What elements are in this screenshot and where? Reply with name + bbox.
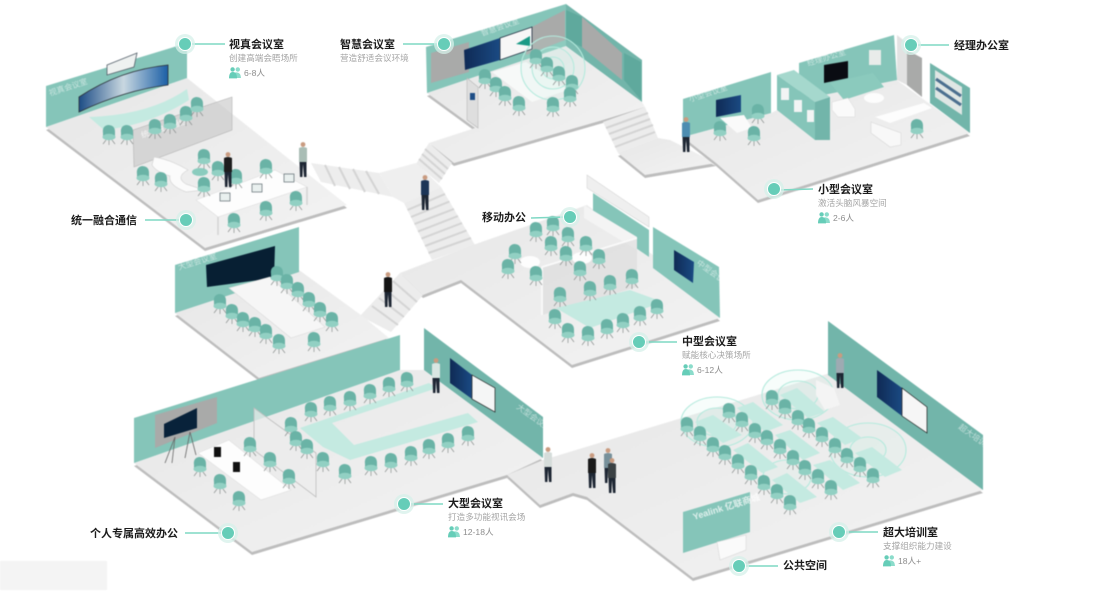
small room screen bbox=[716, 95, 741, 117]
stairs: zigzag flight bbox=[311, 163, 393, 197]
panel: long table room bbox=[175, 227, 389, 381]
training tables bbox=[695, 388, 902, 503]
callout: 大型会议室: 12-18人 bbox=[463, 527, 494, 537]
stairs: flight to long table room bbox=[360, 273, 423, 332]
round tables bbox=[520, 256, 540, 268]
panel: 智慧会议室 room bbox=[426, 4, 645, 166]
display bbox=[206, 246, 275, 287]
wall label: 中型会议室 bbox=[695, 258, 733, 289]
ring pickups bbox=[681, 370, 906, 494]
sofa bbox=[830, 73, 884, 100]
wall label: 大型会议室 bbox=[177, 251, 218, 272]
callout: 经理办公室 bbox=[901, 35, 1009, 55]
callout: 小型会议室: 小型会议室 bbox=[818, 182, 873, 196]
wall label: 超大培训室 bbox=[957, 422, 995, 453]
callout: 小型会议室: 激活头脑风暴空间 bbox=[818, 197, 887, 208]
callout: 经理办公室: 经理办公室 bbox=[954, 38, 1009, 52]
callout: 移动办公 bbox=[482, 207, 580, 227]
workstation desk bbox=[196, 170, 307, 217]
callout: 公共空间: 公共空间 bbox=[783, 558, 827, 572]
callout: 视真会议室 bbox=[175, 34, 298, 78]
callout: 大型会议室: 打造多功能视讯会场 bbox=[448, 511, 526, 522]
stairs: upper connecting flight bbox=[416, 143, 452, 183]
grey board and display bbox=[155, 397, 217, 448]
callout: 个人专属高效办公 bbox=[90, 523, 238, 543]
panel: 超大培训室 and 公共空间 room: Yealink 亿联商城 bbox=[691, 491, 761, 522]
table bbox=[229, 277, 325, 338]
dual display bbox=[877, 370, 902, 416]
callout: 超大培训室: 18人+ bbox=[898, 556, 921, 566]
glass partition bbox=[133, 97, 232, 167]
callout: 统一融合通信: 统一融合通信 bbox=[71, 213, 137, 227]
white sofa bbox=[152, 157, 204, 192]
mint conference table bbox=[556, 290, 663, 328]
callout: 移动办公: 移动办公 bbox=[482, 210, 526, 224]
table with ring pickup bbox=[492, 62, 568, 102]
callout: 超大培训室: 支撑组织能力建设 bbox=[883, 540, 952, 551]
callout: 中型会议室: 赋能核心决策场所 bbox=[682, 349, 751, 360]
callout: 视真会议室: 创建高端会晤场所 bbox=[229, 52, 298, 63]
cabinet block bbox=[777, 70, 830, 102]
panel: bottom left grey patch bbox=[0, 561, 107, 590]
callout: 大型会议室: 大型会议室 bbox=[448, 496, 503, 510]
chairs bbox=[102, 97, 302, 233]
callout: 中型会议室: 6-12人 bbox=[697, 365, 723, 375]
callout: 视真会议室: 视真会议室 bbox=[229, 37, 284, 51]
wall label: 智慧会议室 bbox=[479, 15, 520, 38]
training chairs bbox=[680, 390, 880, 515]
white bulkhead wall bbox=[587, 175, 649, 227]
curved screen bbox=[79, 65, 168, 112]
callout: 个人专属高效办公: 个人专属高效办公 bbox=[90, 526, 178, 540]
callout: 智慧会议室: 营造舒适会议环境 bbox=[340, 52, 409, 63]
panel: 大型会议室 and 个人专属高效办公 room bbox=[134, 328, 553, 555]
stairs: right flight to small room bbox=[603, 107, 716, 178]
callout: 中型会议室: 中型会议室 bbox=[682, 334, 737, 348]
glass divider bbox=[254, 408, 316, 497]
callout: 小型会议室: 2-6人 bbox=[833, 213, 854, 223]
callout: 大型会议室 bbox=[394, 494, 526, 537]
workstation desk bbox=[198, 440, 291, 500]
callout: 统一融合通信 bbox=[71, 210, 196, 230]
callout: 智慧会议室 bbox=[340, 34, 454, 63]
panel: 小型会议室 and 经理办公室 room: 经理办公室 bbox=[806, 47, 847, 68]
chairs bbox=[214, 266, 338, 354]
panel: 移动办公 and 中型会议室 room bbox=[400, 175, 733, 368]
manager desk bbox=[875, 103, 932, 123]
bookcase bbox=[930, 63, 970, 133]
panel: 视真会议室 and 统一融合通信 room bbox=[46, 43, 347, 251]
stairs: central landing and lower flight bbox=[379, 163, 475, 260]
chairs bbox=[194, 372, 474, 511]
callout: 超大培训室: 超大培训室 bbox=[883, 525, 938, 539]
wall labels: 小型会议室 bbox=[688, 82, 729, 104]
callout: 视真会议室: 6-8人 bbox=[244, 68, 265, 78]
chairs bbox=[478, 49, 578, 117]
wall label: 大型会议室 bbox=[515, 402, 553, 433]
icon: dual display bbox=[464, 38, 500, 70]
lectern bbox=[816, 380, 840, 410]
wall label: 视真会议室 bbox=[48, 76, 89, 98]
glass partition bbox=[542, 238, 637, 315]
chairs bbox=[714, 104, 924, 146]
TV bbox=[824, 61, 848, 83]
panel: 超大培训室 and 公共空间 room bbox=[507, 321, 995, 581]
panel: 小型会议室 and 经理办公室 room bbox=[683, 35, 970, 203]
curved table bbox=[89, 89, 189, 130]
U table bbox=[300, 383, 478, 460]
panel: 视真会议室 and 统一融合通信 room: 统一融合通信 bbox=[140, 116, 188, 140]
people figures bbox=[224, 117, 844, 493]
right dual display bbox=[450, 358, 472, 399]
callout: 中型会议室 bbox=[629, 332, 751, 375]
reception banner bbox=[683, 492, 750, 553]
callout: 公共空间 bbox=[729, 556, 827, 576]
callout: 小型会议室 bbox=[764, 179, 887, 223]
callout: 智慧会议室: 智慧会议室 bbox=[340, 37, 395, 51]
callout: 超大培训室 bbox=[829, 522, 952, 566]
chairs bbox=[502, 216, 664, 346]
teal wall bbox=[653, 227, 720, 318]
door panel bbox=[467, 78, 478, 128]
